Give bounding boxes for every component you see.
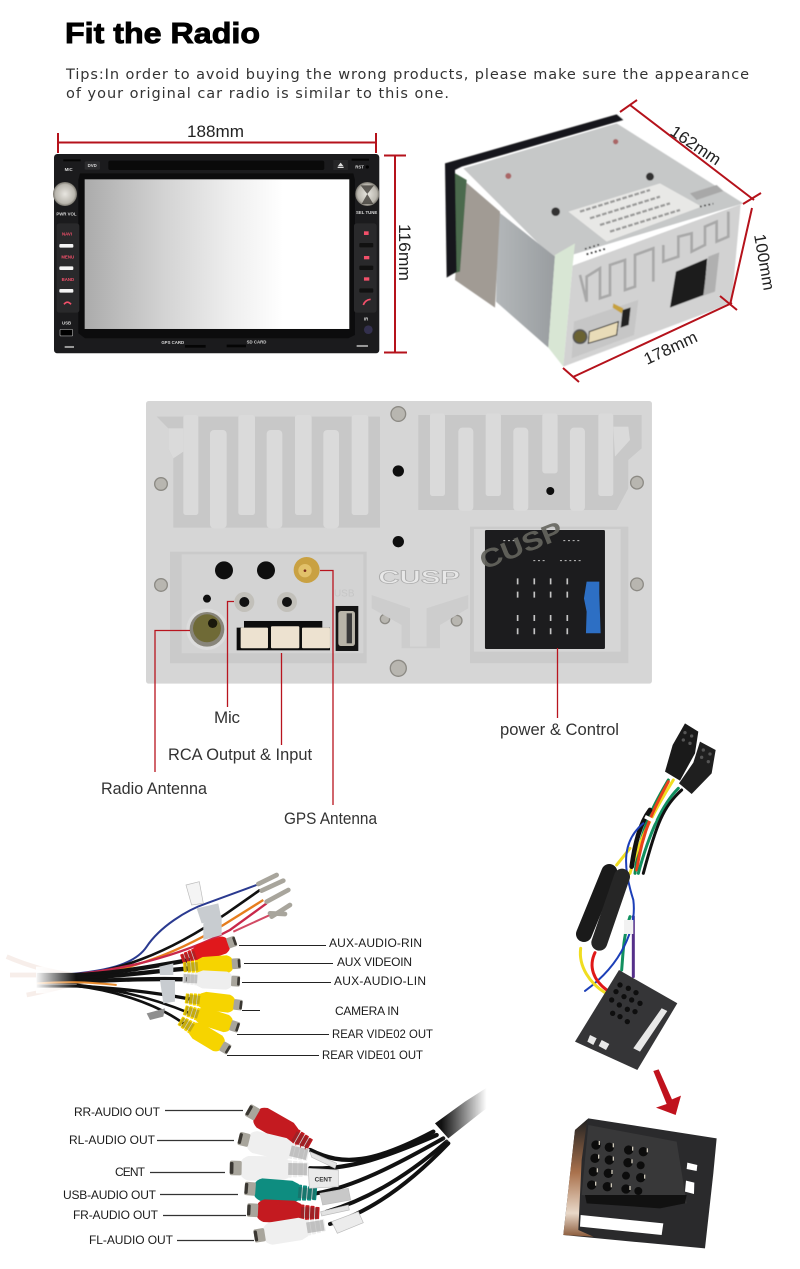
DVD button xyxy=(85,161,100,170)
AV output labels: REAR VIDE01 OUT xyxy=(322,1048,424,1062)
rear panel xyxy=(563,204,741,367)
audio output leader lines xyxy=(150,1110,254,1240)
dimension: 100mm: 100mm xyxy=(750,233,778,292)
adapter wiring harness photo xyxy=(575,723,716,1070)
CUSP logo: CUSP xyxy=(378,567,460,588)
label: Radio Antenna: Radio Antenna xyxy=(101,779,208,798)
thick sleeve xyxy=(435,1072,520,1138)
lower dark strip xyxy=(585,1195,687,1208)
mic jack xyxy=(234,592,254,612)
left heat-sink fins xyxy=(157,415,380,528)
top connector 1 xyxy=(665,723,698,781)
disc slot xyxy=(108,161,324,170)
left fade xyxy=(36,967,76,993)
holes in recess xyxy=(203,561,275,603)
label: Mic: Mic xyxy=(214,708,240,727)
right power recess xyxy=(470,527,628,663)
audio output labels: CENT xyxy=(115,1165,146,1179)
left buttons: BAND xyxy=(62,277,74,282)
AV output labels: AUX VIDEOIN xyxy=(337,955,412,969)
width dimension: 188mm xyxy=(58,123,376,153)
width dimension: 188mm: 188mm xyxy=(187,123,244,141)
dimension: 162mm xyxy=(620,100,761,204)
right buttons xyxy=(354,223,377,313)
connector slots xyxy=(587,1008,667,1052)
right knob xyxy=(355,182,379,215)
cooling fins xyxy=(580,212,728,302)
black cables xyxy=(310,1132,448,1224)
leader: power xyxy=(556,648,558,718)
side face xyxy=(496,212,555,348)
dimension: 178mm: 178mm xyxy=(641,328,700,369)
CENT tag text: CENT xyxy=(315,1177,332,1184)
left knob: PWR VOL xyxy=(56,211,77,216)
socket pins xyxy=(503,541,583,634)
usb xyxy=(621,307,631,328)
right knob: SEL TUNE xyxy=(356,210,377,215)
side bracket xyxy=(455,180,500,308)
height dimension: 116mm xyxy=(384,155,413,353)
white label xyxy=(624,920,633,934)
rear 3/4 view photo of unit xyxy=(445,114,743,367)
usb port: USB xyxy=(334,588,355,599)
tips text: of your original car radio is similar to this one. xyxy=(66,86,449,102)
wires xyxy=(580,780,682,993)
rst label: RST xyxy=(355,164,364,169)
AV output labels xyxy=(322,936,434,1062)
inner face xyxy=(582,1125,687,1203)
left buttons: MENU xyxy=(61,255,74,260)
AV output labels: REAR VIDE02 OUT xyxy=(332,1027,434,1041)
pin tips xyxy=(595,1141,648,1190)
connector holes xyxy=(682,731,712,763)
eject button xyxy=(333,160,348,170)
RCA plugs xyxy=(242,1100,316,1155)
gps antenna connector xyxy=(294,557,320,583)
dimension: 162mm: 162mm xyxy=(667,122,724,169)
port recess xyxy=(572,300,638,358)
leader: mic xyxy=(228,602,234,707)
card slots: GPS CARD xyxy=(161,340,184,345)
white square openings xyxy=(685,1163,697,1194)
audio output labels xyxy=(63,1105,174,1247)
mic label xyxy=(63,159,81,172)
label: GPS Antenna: GPS Antenna xyxy=(284,809,377,828)
usb port xyxy=(334,588,358,651)
green-white foam strip xyxy=(548,243,575,367)
audio output labels: FL-AUDIO OUT xyxy=(89,1233,174,1247)
screen bezel xyxy=(78,173,355,338)
gold antenna xyxy=(613,303,623,313)
black front panel edge xyxy=(445,114,623,278)
ir sensor xyxy=(364,317,373,334)
faded cable tails xyxy=(7,957,73,995)
pins xyxy=(587,1140,648,1195)
audio output labels: RR-AUDIO OUT xyxy=(74,1105,161,1119)
audio output labels: RL-AUDIO OUT xyxy=(69,1133,156,1147)
screen xyxy=(85,179,349,329)
AV cable photo xyxy=(7,875,290,1058)
AV output leader lines xyxy=(227,946,333,1056)
left buttons: NAVI xyxy=(62,232,72,237)
audio output labels: USB-AUDIO OUT xyxy=(63,1188,157,1202)
black power socket xyxy=(485,530,605,649)
AV output labels: CAMERA IN xyxy=(335,1004,399,1018)
screws xyxy=(155,407,643,676)
circuit board xyxy=(448,170,467,275)
left buttons xyxy=(57,223,79,313)
blue fuse xyxy=(584,582,601,633)
Y shaped ridge xyxy=(372,595,468,648)
vent slots xyxy=(585,204,713,254)
round connector xyxy=(573,330,587,343)
connector body xyxy=(563,1118,717,1248)
mic label: MIC xyxy=(65,167,73,172)
DVD button: DVD xyxy=(88,163,97,168)
leader: RCA xyxy=(280,653,282,745)
black power connector xyxy=(670,258,707,308)
leader: GPS xyxy=(320,570,333,805)
audio output labels: FR-AUDIO OUT xyxy=(73,1208,159,1222)
left port recess xyxy=(170,552,367,663)
ir sensor: IR xyxy=(364,317,369,322)
AV output labels: AUX-AUDIO-LIN xyxy=(334,974,426,988)
pin sockets xyxy=(609,982,643,1024)
audio cable photo xyxy=(230,1070,526,1247)
title: Fit the Radio xyxy=(65,18,260,50)
barcode sticker xyxy=(690,185,723,200)
CUSP watermark: CUSP xyxy=(475,515,567,576)
white connector blocks xyxy=(237,621,330,650)
right heat-sink fins xyxy=(418,413,642,511)
connector block xyxy=(588,322,618,343)
leader: radio antenna xyxy=(155,630,190,772)
usb port xyxy=(60,321,73,336)
sleeve fade xyxy=(442,1070,526,1142)
tips text xyxy=(65,67,749,102)
dimension: 178mm xyxy=(563,303,732,382)
dimension: 100mm xyxy=(720,208,778,310)
radio antenna socket xyxy=(186,609,228,650)
wires xyxy=(37,885,283,1023)
usb port: USB xyxy=(62,321,71,326)
rear panel close-up photo xyxy=(146,401,652,684)
white slot xyxy=(580,1215,663,1235)
label: power & Control: power & Control xyxy=(500,720,619,739)
head unit front photo xyxy=(53,154,379,353)
card slots: SD CARD xyxy=(247,339,266,344)
holes xyxy=(393,465,554,547)
rst label xyxy=(352,159,369,169)
tips text: Tips:In order to avoid buying the wrong products, please make sure the appearance xyxy=(65,67,749,83)
metal terminals xyxy=(258,875,290,917)
height dimension: 116mm: 116mm xyxy=(395,224,413,281)
RCA plugs xyxy=(179,932,239,968)
cable tags xyxy=(308,1152,363,1233)
left knob xyxy=(53,182,77,216)
red arrow xyxy=(653,1069,681,1115)
top connector 2 xyxy=(679,742,716,794)
top cover xyxy=(463,123,743,260)
AV output labels: AUX-AUDIO-RIN xyxy=(329,936,422,950)
second jack xyxy=(277,592,297,612)
mounting holes xyxy=(505,139,654,216)
copper reflective side xyxy=(563,1119,593,1237)
bottom car connector xyxy=(575,970,677,1070)
card slots xyxy=(65,339,368,348)
ferrite sleeve xyxy=(584,872,622,943)
white cable tie xyxy=(645,817,655,822)
connector close-up photo xyxy=(563,1118,717,1248)
top label sticker xyxy=(568,183,702,242)
label: RCA Output & Input: RCA Output & Input xyxy=(168,745,312,764)
white clips xyxy=(147,882,222,1020)
